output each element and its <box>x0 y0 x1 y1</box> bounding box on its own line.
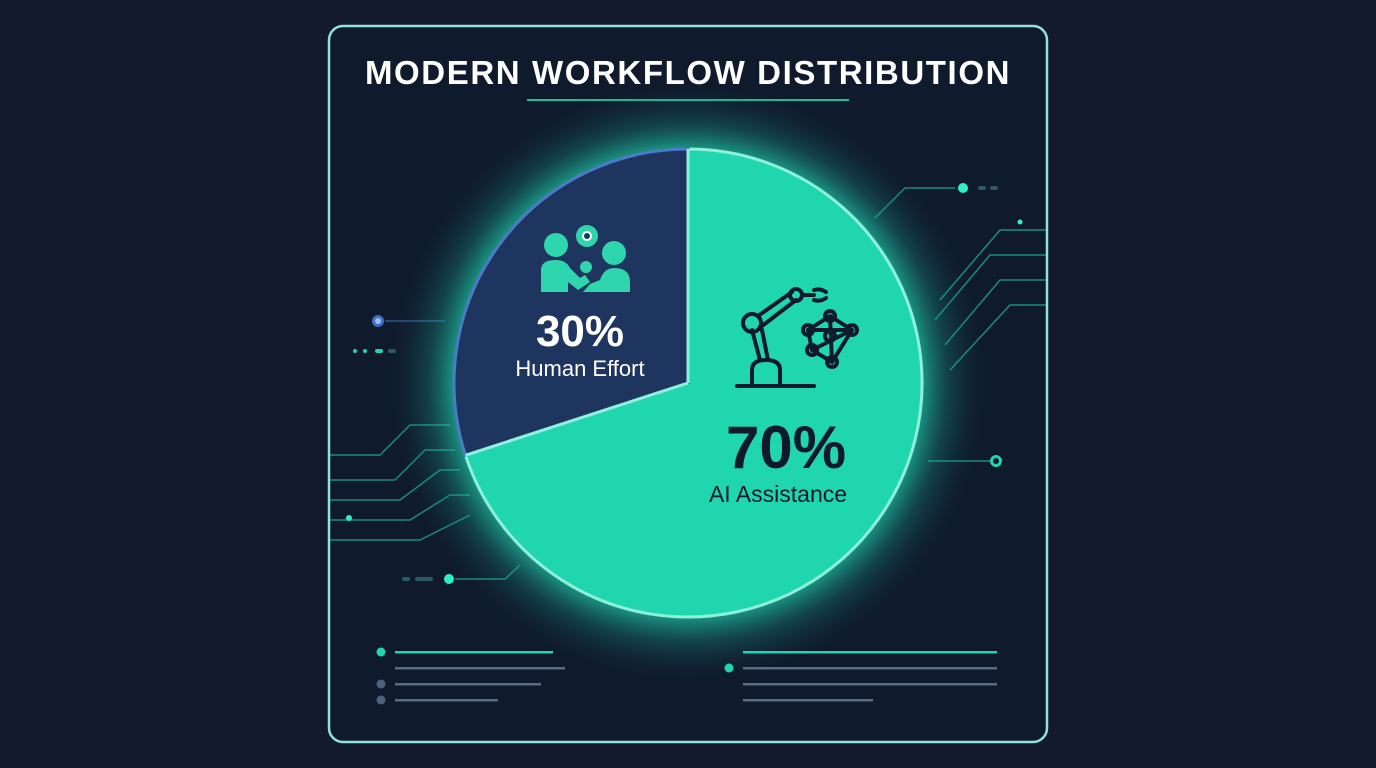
circuit lines: left <box>330 321 520 579</box>
slice: AI assistance 70% <box>466 149 922 617</box>
icon: robot arm and network <box>737 289 857 386</box>
pie chart: AI Assistance <box>709 481 847 507</box>
label: 70% AI assistance: 70% <box>726 414 846 481</box>
pie chart <box>383 78 993 688</box>
nodes <box>346 183 1022 584</box>
legend left <box>376 648 565 704</box>
title underline <box>527 99 849 101</box>
panel <box>329 26 1047 742</box>
title: MODERN WORKFLOW DISTRIBUTION <box>365 54 1011 91</box>
legend right <box>724 651 997 702</box>
label: 30% human effort: 30% <box>536 307 624 356</box>
circuit lines: right <box>875 188 1046 461</box>
icon: humans with gears <box>541 225 630 292</box>
pie chart: Human Effort <box>515 356 645 381</box>
slice: human effort 30% <box>454 149 688 455</box>
